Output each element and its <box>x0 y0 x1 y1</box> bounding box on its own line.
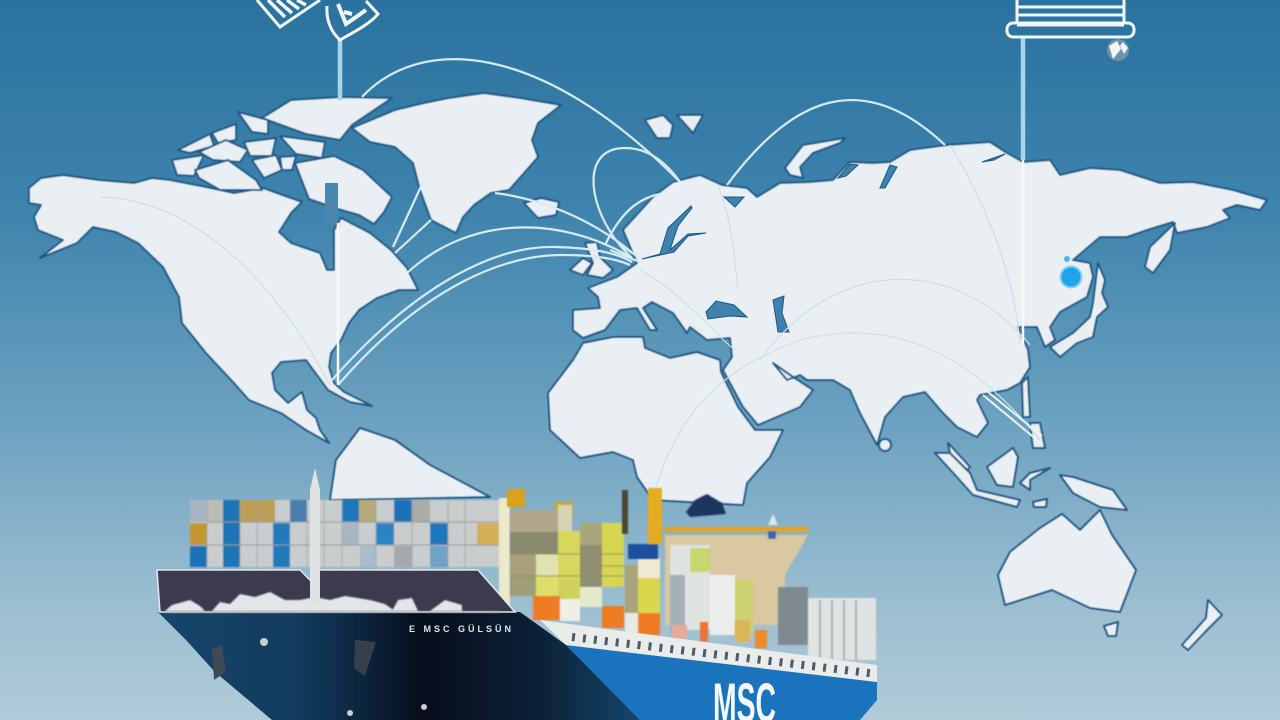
continent: North America <box>29 175 418 443</box>
Kamchatka island <box>1145 223 1175 273</box>
South America <box>330 428 490 500</box>
Great Britain <box>585 242 613 278</box>
Greenland <box>352 93 561 233</box>
Iceland <box>524 198 559 218</box>
hull: navy bow <box>158 612 640 720</box>
middle container stacks <box>507 489 660 635</box>
trade route arcs <box>332 59 945 385</box>
continent: Eurasia <box>573 142 1267 445</box>
front container stack <box>190 498 510 610</box>
Africa <box>548 337 783 505</box>
ship mast <box>310 468 320 605</box>
faint routes over land <box>100 145 1040 490</box>
Arctic islands <box>172 97 392 224</box>
Novaya Zemlya <box>785 138 845 178</box>
Southeast Asia islands <box>935 377 1127 510</box>
Australia <box>998 510 1136 612</box>
hull side: blue <box>566 645 877 720</box>
Sri Lanka <box>879 439 891 451</box>
icon: container at top right <box>1007 0 1134 37</box>
anchor and hull details <box>212 638 427 716</box>
deck equipment <box>165 592 500 612</box>
New Zealand <box>1182 600 1222 650</box>
Tasmania <box>1104 622 1118 636</box>
vertical connector lines <box>338 38 1023 385</box>
Japan <box>1050 263 1108 357</box>
world map <box>29 93 1267 650</box>
rear container stacks <box>672 587 876 660</box>
icon: shield at top left <box>327 1 378 40</box>
route to Philippines <box>983 392 1042 440</box>
deck rail <box>540 620 877 682</box>
Svalbard <box>645 115 673 138</box>
icon: container at top left <box>257 0 320 27</box>
ship name on hull: E MSC GÜLSÜN <box>409 624 511 634</box>
location marker <box>1060 256 1082 288</box>
bow deck: dark grey <box>157 570 515 612</box>
icon: small globe <box>1107 39 1129 61</box>
container ship <box>157 468 877 720</box>
Ireland <box>570 258 592 275</box>
accommodation block and bridge <box>622 488 808 635</box>
inland seas and gulfs <box>325 154 1005 332</box>
